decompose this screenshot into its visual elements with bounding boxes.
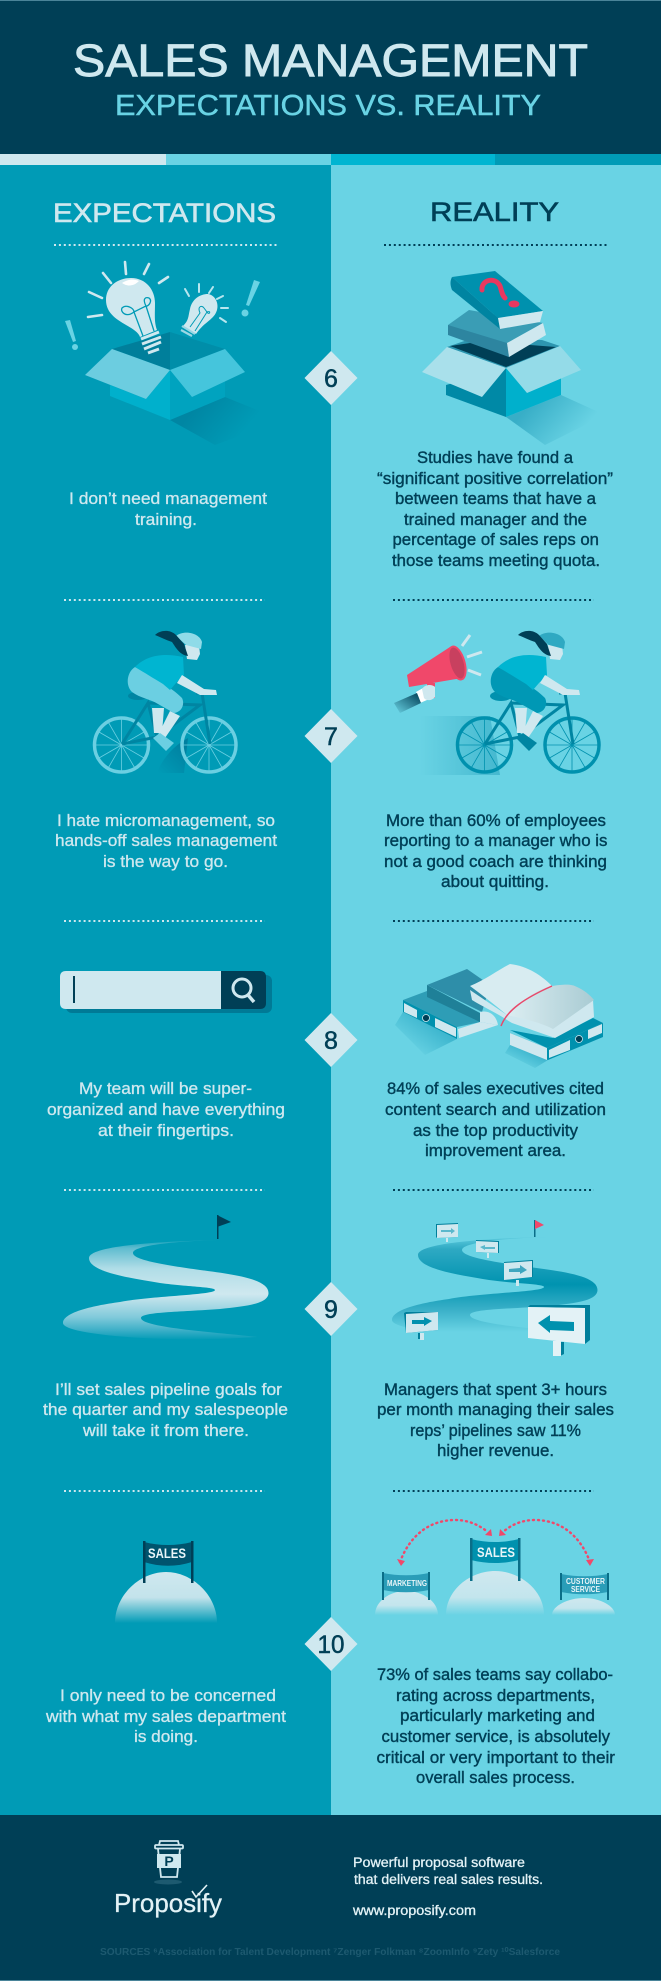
icon: cyclist (expectation) — [94, 631, 236, 773]
badge: 7: 7 — [324, 723, 338, 751]
header — [0, 0, 661, 154]
icon: winding road with flag (expectation) — [63, 1215, 268, 1339]
logo: proposify: Proposify — [114, 1888, 222, 1918]
text: reality 10: critical or very important to their — [376, 1749, 616, 1767]
text: reality 6: trained manager and the — [404, 511, 587, 529]
box — [85, 349, 245, 420]
motion shadow — [420, 716, 500, 775]
icon: winding road with signs (reality) — [392, 1220, 598, 1356]
text: reality 8: 84% of sales executives cited — [387, 1080, 604, 1098]
text: reality 10 — [376, 1666, 616, 1787]
colour strip — [0, 154, 661, 165]
sign 3 — [504, 1260, 533, 1286]
text: reality 7 — [384, 812, 608, 891]
title: SALES MANAGEMENT — [73, 35, 588, 86]
text: reality 9: higher revenue. — [437, 1442, 554, 1460]
icon: light bulbs in box — [65, 262, 282, 445]
sign 2 — [476, 1240, 499, 1258]
text: expectation 7: is the way to go. — [103, 853, 228, 871]
lower book — [448, 310, 546, 357]
text: expectation 9: I’ll set sales pipeline goals for — [55, 1381, 283, 1399]
text: expectation 6 — [69, 490, 267, 529]
ribbon — [501, 986, 552, 1026]
text: reality 10: customer service, is absolutely — [382, 1728, 611, 1746]
text: reality 7: not a good coach are thinking — [384, 853, 607, 871]
panel: reality column background — [331, 165, 661, 1815]
text: reality 10: particularly marketing and — [400, 1707, 595, 1725]
sign 5 — [528, 1305, 590, 1356]
text: reality 8: improvement area. — [425, 1142, 566, 1160]
logo: proposify: P — [164, 1853, 174, 1869]
text: expectation 10: I only need to be concerned — [60, 1687, 276, 1705]
text: reality 6: percentage of sales reps on — [392, 531, 599, 549]
box — [422, 346, 581, 417]
tagline — [352, 1855, 543, 1918]
upper book — [450, 271, 543, 329]
customer service flag and hill: CUSTOMER — [566, 1577, 605, 1586]
exclamation marks — [65, 280, 260, 350]
sales flag and hill: SALES — [477, 1545, 515, 1560]
subtitle: EXPECTATIONS VS. REALITY — [115, 90, 541, 122]
text: expectation 7 — [55, 812, 277, 871]
badge: 10: 10 — [318, 1631, 344, 1659]
text: reality 7: More than 60% of employees — [386, 812, 606, 830]
text: reality 8 — [385, 1080, 606, 1160]
text: reality 10: 73% of sales teams say collabo- — [377, 1666, 613, 1684]
text: expectation 9: the quarter and my salespeople — [43, 1401, 288, 1419]
text: expectation 10 — [45, 1687, 286, 1746]
text: reality 9 — [377, 1381, 614, 1460]
icon: binders and open book — [395, 964, 603, 1068]
text: reality 6: “significant positive correlation” — [377, 470, 613, 488]
text: reality 7: reporting to a manager who is — [384, 832, 608, 850]
badge: 8: 8 — [324, 1027, 338, 1055]
text: reality 6: between teams that have a — [395, 490, 597, 508]
open book — [470, 964, 594, 1038]
text: expectation 9 — [43, 1381, 288, 1440]
text: expectation 6: I don’t need management — [69, 490, 267, 508]
text: reality 9: Managers that spent 3+ hours — [384, 1381, 607, 1399]
text: reality 6: those teams meeting quota. — [392, 552, 600, 570]
logo: proposify — [114, 1841, 222, 1918]
heading: reality: REALITY — [430, 197, 559, 227]
icon: search bar — [60, 971, 272, 1013]
icon: sales, marketing and customer service hills (reality) — [375, 1520, 615, 1615]
sales flag and hill — [446, 1538, 544, 1615]
text: expectation 7: I hate micromanagement, so — [57, 812, 275, 830]
customer service flag and hill: SERVICE — [571, 1585, 601, 1594]
badge: 10 — [304, 1617, 358, 1671]
badge: 8 — [304, 1013, 358, 1067]
marketing flag and hill — [375, 1572, 438, 1615]
text: expectation 8 — [47, 1080, 285, 1140]
icon: sales hill (expectation): SALES — [148, 1546, 186, 1561]
panel: expectations column background — [0, 165, 331, 1815]
text: expectation 6: training. — [135, 511, 197, 529]
text: reality 10: rating across departments, — [396, 1687, 595, 1705]
megaphone — [394, 645, 469, 713]
right binder — [510, 1018, 603, 1060]
text: expectation 8: at their fingertips. — [98, 1122, 234, 1140]
footer — [0, 1815, 661, 1981]
text: expectation 7: hands-off sales management — [55, 832, 277, 850]
text: expectation 9: will take it from there. — [82, 1422, 249, 1440]
badge: 6 — [304, 351, 358, 405]
text: reality 7: about quitting. — [441, 873, 549, 891]
badge: 7 — [304, 709, 358, 763]
big bulb — [106, 278, 161, 353]
icon: sales hill (expectation) — [115, 1541, 217, 1623]
text: reality 10: overall sales process. — [416, 1769, 575, 1787]
small bulb — [181, 294, 218, 336]
icon: books in box with question mark — [422, 271, 605, 445]
left binders — [403, 969, 498, 1039]
tagline: Powerful proposal software — [353, 1855, 525, 1870]
tagline: www.proposify.com — [352, 1903, 476, 1918]
text: reality 6 — [377, 449, 613, 570]
sign 1 — [436, 1223, 458, 1242]
text: expectation 8: My team will be super- — [79, 1080, 252, 1098]
rays — [88, 262, 168, 317]
marketing flag and hill: MARKETING — [387, 1578, 427, 1588]
text: reality 8: as the top productivity — [413, 1122, 579, 1140]
badge: 9 — [304, 1282, 358, 1336]
badge: 6: 6 — [324, 365, 338, 393]
collaboration arrows — [397, 1520, 594, 1566]
tagline: that delivers real sales results. — [354, 1872, 543, 1887]
text: reality 9: per month managing their sales — [377, 1401, 614, 1419]
text: reality 9: reps’ pipelines saw 11% — [410, 1422, 581, 1440]
customer service flag and hill — [552, 1573, 615, 1615]
text: expectation 10: is doing. — [134, 1728, 198, 1746]
sign 4 — [404, 1312, 438, 1340]
text: reality 8: content search and utilization — [385, 1101, 606, 1119]
text: expectation 10: with what my sales department — [45, 1708, 286, 1726]
text: reality 6: Studies have found a — [417, 449, 574, 467]
badge: 9: 9 — [324, 1296, 338, 1324]
red flag — [534, 1220, 544, 1237]
icon: cyclist with megaphone (reality) — [394, 631, 599, 775]
sources: SOURCES ⁶Association for Talent Development ⁷Zenger Folkman ⁸ZoomInfo ⁹Zety ¹⁰Salesforce — [100, 1946, 560, 1958]
heading: expectations: EXPECTATIONS — [53, 198, 276, 228]
text: expectation 8: organized and have everything — [47, 1101, 285, 1119]
cup — [155, 1841, 183, 1877]
